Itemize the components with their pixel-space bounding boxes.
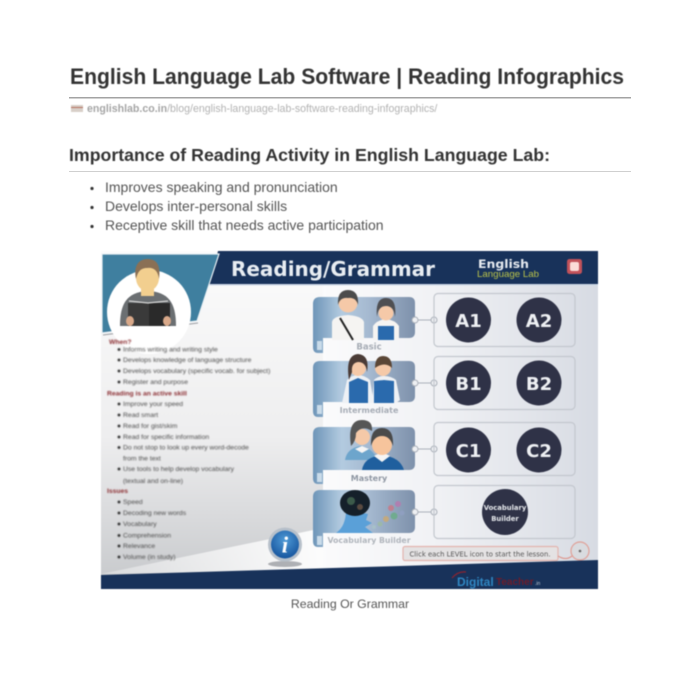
text block: reading notes: Issues (107, 488, 128, 495)
level card: Vocabulary Builder (313, 490, 415, 547)
image caption: Reading Or Grammar (291, 597, 409, 611)
level group: B1 B2: B2 (526, 374, 552, 395)
connector nodes (412, 509, 437, 515)
level card: Basic (313, 290, 415, 353)
level group: Vocabulary Builder: Vocabulary (484, 504, 527, 512)
connector: Mastery to C group (415, 448, 434, 450)
level group: C1 C2: C2 (526, 441, 552, 462)
logo: Digital Teacher: .in (535, 581, 540, 587)
text block: reading notes: Read smart (123, 412, 158, 419)
level group: Vocabulary Builder (434, 486, 575, 538)
students (342, 354, 400, 403)
text block: reading notes: (textual and on-line) (123, 478, 183, 485)
header bar (209, 251, 598, 286)
students (332, 290, 399, 340)
level group: A1 A2: A2 (526, 311, 552, 332)
logo: English Language Lab (477, 257, 539, 280)
connector: Vocabulary to group (415, 511, 434, 513)
text block: reading notes: Speed (123, 499, 143, 506)
text block: reading notes: Relevance (123, 543, 155, 550)
logo: English Language Lab: Language Lab (477, 269, 539, 280)
connector nodes (412, 446, 437, 452)
bullet list (90, 179, 384, 233)
text block: reading notes: Develops vocabulary (specific vocab. for subject) (123, 368, 270, 375)
logo: Digital Teacher (452, 572, 540, 589)
text block: reading notes: Informs writing and writing style (123, 346, 218, 354)
level group: Vocabulary Builder: Builder (491, 515, 519, 523)
text block: reading notes: Use tools to help develop vocabulary (123, 466, 235, 473)
label: Vocabulary Builder (327, 536, 411, 545)
text block: reading notes: When? (109, 339, 132, 346)
text block: reading notes: Reading is an active skill (107, 390, 187, 398)
students (345, 420, 404, 470)
text block: reading notes: Vocabulary (123, 521, 157, 528)
logo: Digital Teacher: Digital (457, 575, 494, 589)
footer bar (101, 560, 598, 589)
level group: A1 A2: A1 (455, 311, 482, 332)
text block: reading notes: from the text (123, 456, 161, 462)
text block: reading notes: Register and purpose (123, 379, 188, 386)
bullet list: Receptive skill that needs active participation (105, 217, 384, 233)
icon: info button: i (282, 532, 289, 558)
header bar: Reading/Grammar (231, 257, 435, 281)
page title: English Language Lab Software | Reading Infographics (70, 64, 624, 89)
icon: reading person (120, 259, 176, 326)
logo: English Language Lab: English (478, 257, 529, 271)
text block: reading notes (107, 339, 270, 561)
bullet list: Improves speaking and pronunciation (105, 179, 338, 195)
label: Mastery (351, 474, 388, 483)
source url: englishlab.co.in/blog/english-language-lab-software-reading-infographics/ (87, 103, 437, 115)
text block: reading notes: Read for gist/skim (123, 423, 178, 430)
callout: lesson instruction: Click each LEVEL icon to start the lesson. (410, 550, 550, 558)
level group: C1 C2: C1 (456, 441, 481, 462)
level group: B1 B2: B1 (455, 374, 482, 395)
level card: Intermediate (313, 354, 415, 417)
icon: info button (268, 528, 302, 567)
label: Basic (356, 342, 382, 352)
level group: A1 A2 (434, 294, 575, 346)
text block: reading notes: Do not stop to look up every word-decode (123, 444, 249, 452)
connector nodes (412, 380, 437, 386)
icon: home button (567, 259, 582, 274)
text block: reading notes: Improve your speed (123, 401, 183, 408)
text block: reading notes: Volume (in study) (123, 554, 176, 561)
connector: Basic to A group (415, 319, 434, 321)
level group: B1 B2 (434, 356, 575, 410)
level group: C1 C2 (434, 422, 575, 476)
connector nodes (412, 317, 437, 323)
panel: Reading/Grammar screenshot (101, 251, 598, 589)
logo: Digital Teacher: Teacher (496, 577, 534, 588)
icon: site favicon (71, 105, 83, 112)
text block: reading notes: Comprehension (123, 532, 171, 540)
section heading: Importance of Reading Activity in English Language Lab: (69, 145, 550, 165)
bullet list: Develops inter-personal skills (105, 198, 287, 214)
text block: reading notes: Decoding new words (123, 510, 187, 517)
text block: reading notes: Develops knowledge of language structure (123, 357, 252, 364)
text block: reading notes: Read for specific information (123, 434, 209, 441)
level card: Mastery (313, 420, 415, 484)
callout: lesson instruction (403, 542, 589, 560)
connector: Intermediate to B group (415, 382, 434, 384)
illustration: reader badge (102, 254, 219, 354)
label: Intermediate (340, 406, 399, 415)
head and word cloud (336, 490, 404, 533)
